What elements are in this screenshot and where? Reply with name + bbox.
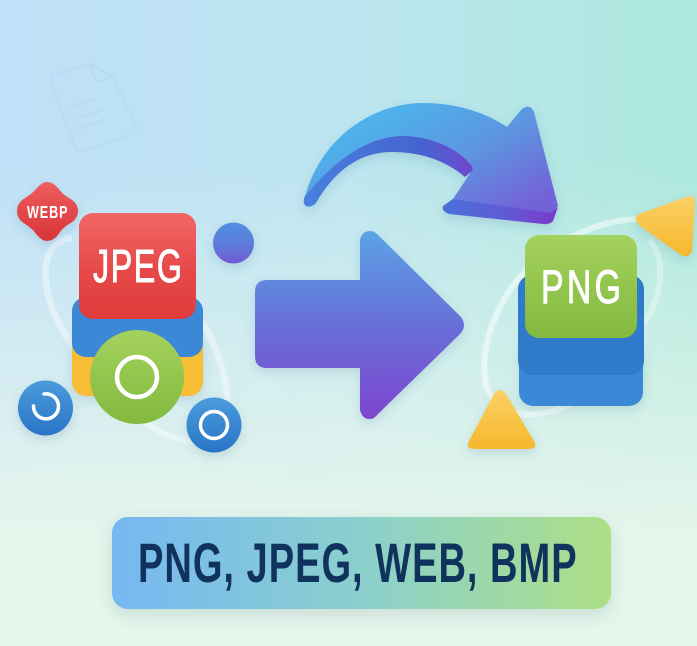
label: PNG: PNG [541, 261, 621, 313]
icon: blue spinner circle [18, 380, 73, 436]
banner [112, 517, 611, 609]
label: WEBP: WEBP [27, 203, 68, 223]
yellow layer [72, 330, 203, 396]
icon: faint document [51, 64, 136, 151]
green PNG card [525, 235, 637, 338]
banner text: PNG, JPEG, WEB, BMP [138, 533, 577, 595]
green circle icon [90, 330, 184, 424]
icon: purple ball [213, 222, 254, 264]
orbit ring: right stack [484, 219, 660, 415]
curved arrow body [305, 103, 558, 214]
icon: blue ring circle [186, 398, 242, 452]
file stack: PNG [518, 235, 644, 406]
file stack: JPEG [72, 213, 203, 424]
blue layer [72, 297, 203, 357]
red JPEG card [79, 213, 196, 319]
label: JPEG: JPEG [93, 241, 182, 292]
big right arrow [255, 231, 464, 419]
curved arrow head shade [443, 199, 558, 224]
curved arrow inner sweep [304, 136, 473, 207]
lower blue layer [519, 340, 643, 406]
curved arrow [304, 103, 558, 224]
icon: yellow triangle bottom [468, 390, 535, 449]
icon: WEBP badge [17, 182, 78, 241]
orbit ring: left stack [45, 238, 227, 441]
icon: yellow triangle top right [636, 196, 695, 256]
upper blue layer [518, 275, 644, 375]
